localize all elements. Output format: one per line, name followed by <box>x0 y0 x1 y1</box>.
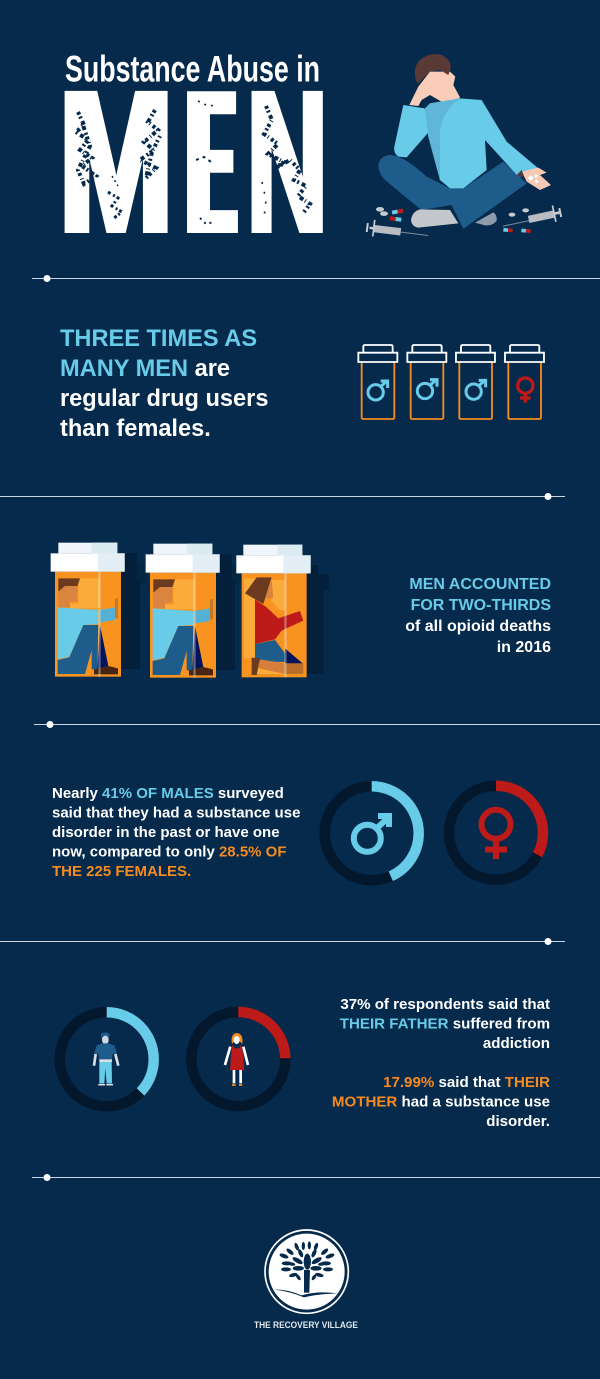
title line: Substance Abuse in: Substance Abuse in <box>65 48 320 90</box>
donut: male 41 percent <box>325 786 419 880</box>
divider 3 <box>34 721 600 728</box>
text: men accounted for two-thirds: FOR TWO-THIRDS <box>411 597 551 614</box>
bottle: man 1 <box>51 543 147 677</box>
text: 41 percent of males: now, compared to only <box>52 844 219 860</box>
text: father and mother statistics: 17.99% said that THEIR <box>383 1074 550 1091</box>
syringe left <box>365 219 429 243</box>
bottle: male 1 <box>358 345 397 419</box>
sweater shade <box>425 98 460 180</box>
sweater <box>425 98 538 188</box>
bottle: female <box>505 345 544 419</box>
logo wordmark: THE RECOVERY VILLAGE <box>254 1320 358 1331</box>
divider 5 <box>32 1174 600 1181</box>
text: 41 percent of males: Nearly <box>52 785 102 802</box>
male symbol <box>354 816 389 852</box>
title word: MEN: N <box>247 54 328 268</box>
cuff <box>517 170 524 178</box>
sock left <box>411 209 458 228</box>
four small pill bottles <box>358 345 544 419</box>
text: men accounted for two-thirds: MEN ACCOUNTED <box>409 576 551 593</box>
three large pill bottles with people <box>51 543 329 678</box>
text: men accounted for two-thirds: of all opioid deaths <box>405 618 551 635</box>
figure: man <box>94 1032 118 1085</box>
text: father and mother statistics: MOTHER had a substance use <box>332 1094 550 1110</box>
hair <box>415 54 451 84</box>
text: father and mother statistics: addiction <box>483 1035 550 1052</box>
logo: The Recovery Village tree <box>265 1230 348 1313</box>
text: father and mother statistics: disorder. <box>486 1113 550 1130</box>
text: 41 percent of males: said that they had a substance use <box>52 804 300 822</box>
text: 41 percent of males: disorder in the past or have one <box>52 824 280 841</box>
title word: MEN: M <box>59 54 174 268</box>
text: 41 percent of males: 28.5% OF <box>219 844 286 860</box>
title word: MEN: E <box>181 47 241 277</box>
text: three times as many men: are <box>188 356 230 382</box>
front shin <box>452 167 527 229</box>
bottle: man 2 <box>146 544 242 678</box>
female symbol <box>482 810 510 859</box>
text: three times as many men: than females. <box>60 416 211 442</box>
distressed texture on MEN <box>76 92 310 233</box>
bottle: male 2 <box>407 345 446 419</box>
text: three times as many men: regular drug users <box>60 386 268 412</box>
text: men accounted for two-thirds: in 2016 <box>497 639 551 656</box>
hand with pills <box>522 168 551 190</box>
divider 4 <box>0 938 565 945</box>
donut: female 28.5 percent <box>449 786 543 880</box>
illustration: man sitting with pills and syringes <box>365 54 563 243</box>
bottle: woman <box>236 545 329 677</box>
text: father and mother statistics: 37% of respondents said that <box>340 996 550 1013</box>
bottle: male 3 <box>456 345 495 419</box>
divider 2 <box>0 493 565 500</box>
donut: father 37 percent <box>60 1012 154 1106</box>
sleeve <box>394 105 430 157</box>
text: three times as many men: THREE TIMES AS <box>60 326 257 352</box>
figure: woman <box>225 1033 248 1085</box>
divider 1 <box>32 275 600 282</box>
left leg and right leg <box>378 155 527 229</box>
title word: MEN <box>59 47 328 277</box>
sock right <box>475 212 497 225</box>
syringe right <box>501 204 563 233</box>
capsules and tablets <box>376 207 531 233</box>
pills in hand <box>528 174 538 183</box>
text: three times as many men: MANY MEN <box>60 356 188 382</box>
text: 41 percent of males: 41% OF MALES surveyed <box>102 785 284 802</box>
arm skin <box>409 72 460 107</box>
text: father and mother statistics: THEIR FATHER suffered from <box>340 1016 550 1032</box>
text: 41 percent of males: THE 225 FEMALES. <box>52 863 191 880</box>
donut: mother 17.99 percent <box>191 1012 285 1106</box>
